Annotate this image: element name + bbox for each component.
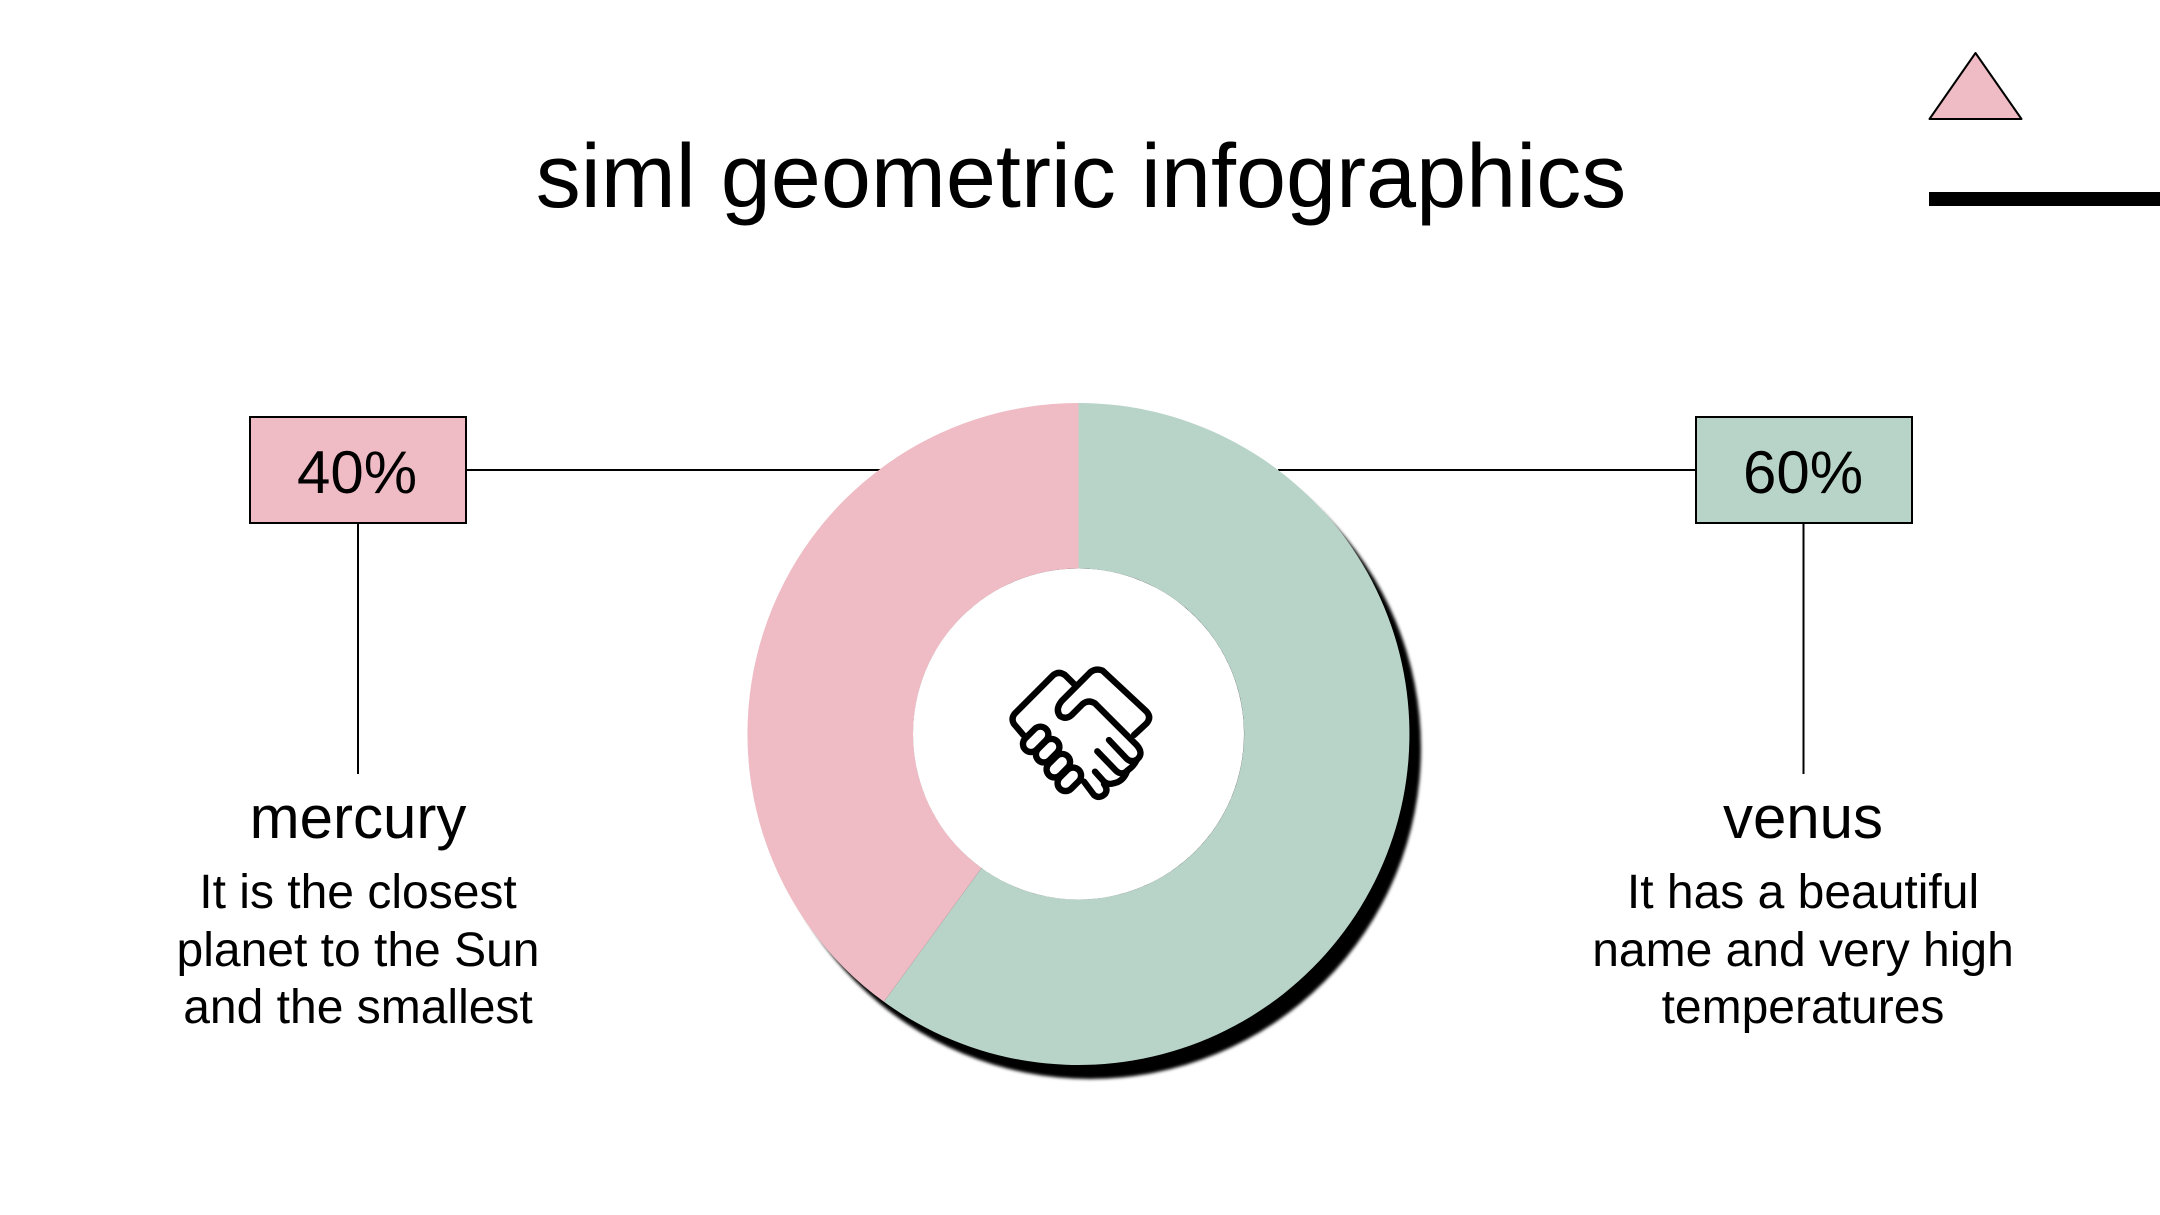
decorative pink triangle <box>1930 53 2022 119</box>
text block: mercury: mercury <box>250 784 466 851</box>
decorative black bar <box>1929 192 2160 206</box>
text block: venus: It has a beautiful <box>1627 866 1979 919</box>
donut chart <box>747 403 1421 1079</box>
connector: mercury box to label <box>357 523 359 774</box>
donut segment: venus 60% <box>884 403 1409 1065</box>
donut hole <box>913 568 1244 900</box>
text block: mercury: and the smallest <box>183 981 533 1034</box>
text block: venus: temperatures <box>1662 981 1944 1034</box>
connector: mercury box to donut <box>466 469 882 471</box>
icon: handshake <box>1013 670 1149 797</box>
percentage box: venus 60% <box>1696 417 1912 523</box>
text block: venus: venus <box>1723 784 1883 851</box>
donut drop shadow <box>759 417 1421 1079</box>
text block: mercury: It is the closest <box>199 866 517 919</box>
text block: mercury <box>177 784 539 1034</box>
text block: venus: name and very high <box>1592 924 2014 977</box>
percentage box: mercury 40%: 40% <box>297 439 417 506</box>
text block: venus <box>1592 784 2014 1034</box>
percentage box: venus 60%: 60% <box>1743 439 1863 506</box>
donut segment: mercury 40% <box>747 403 1078 1002</box>
connector: venus box to donut <box>1278 469 1696 471</box>
percentage box: mercury 40% <box>250 417 466 523</box>
connector: venus box to label <box>1802 523 1804 774</box>
text block: mercury: planet to the Sun <box>177 924 539 977</box>
title: siml geometric infographics <box>536 127 1626 227</box>
